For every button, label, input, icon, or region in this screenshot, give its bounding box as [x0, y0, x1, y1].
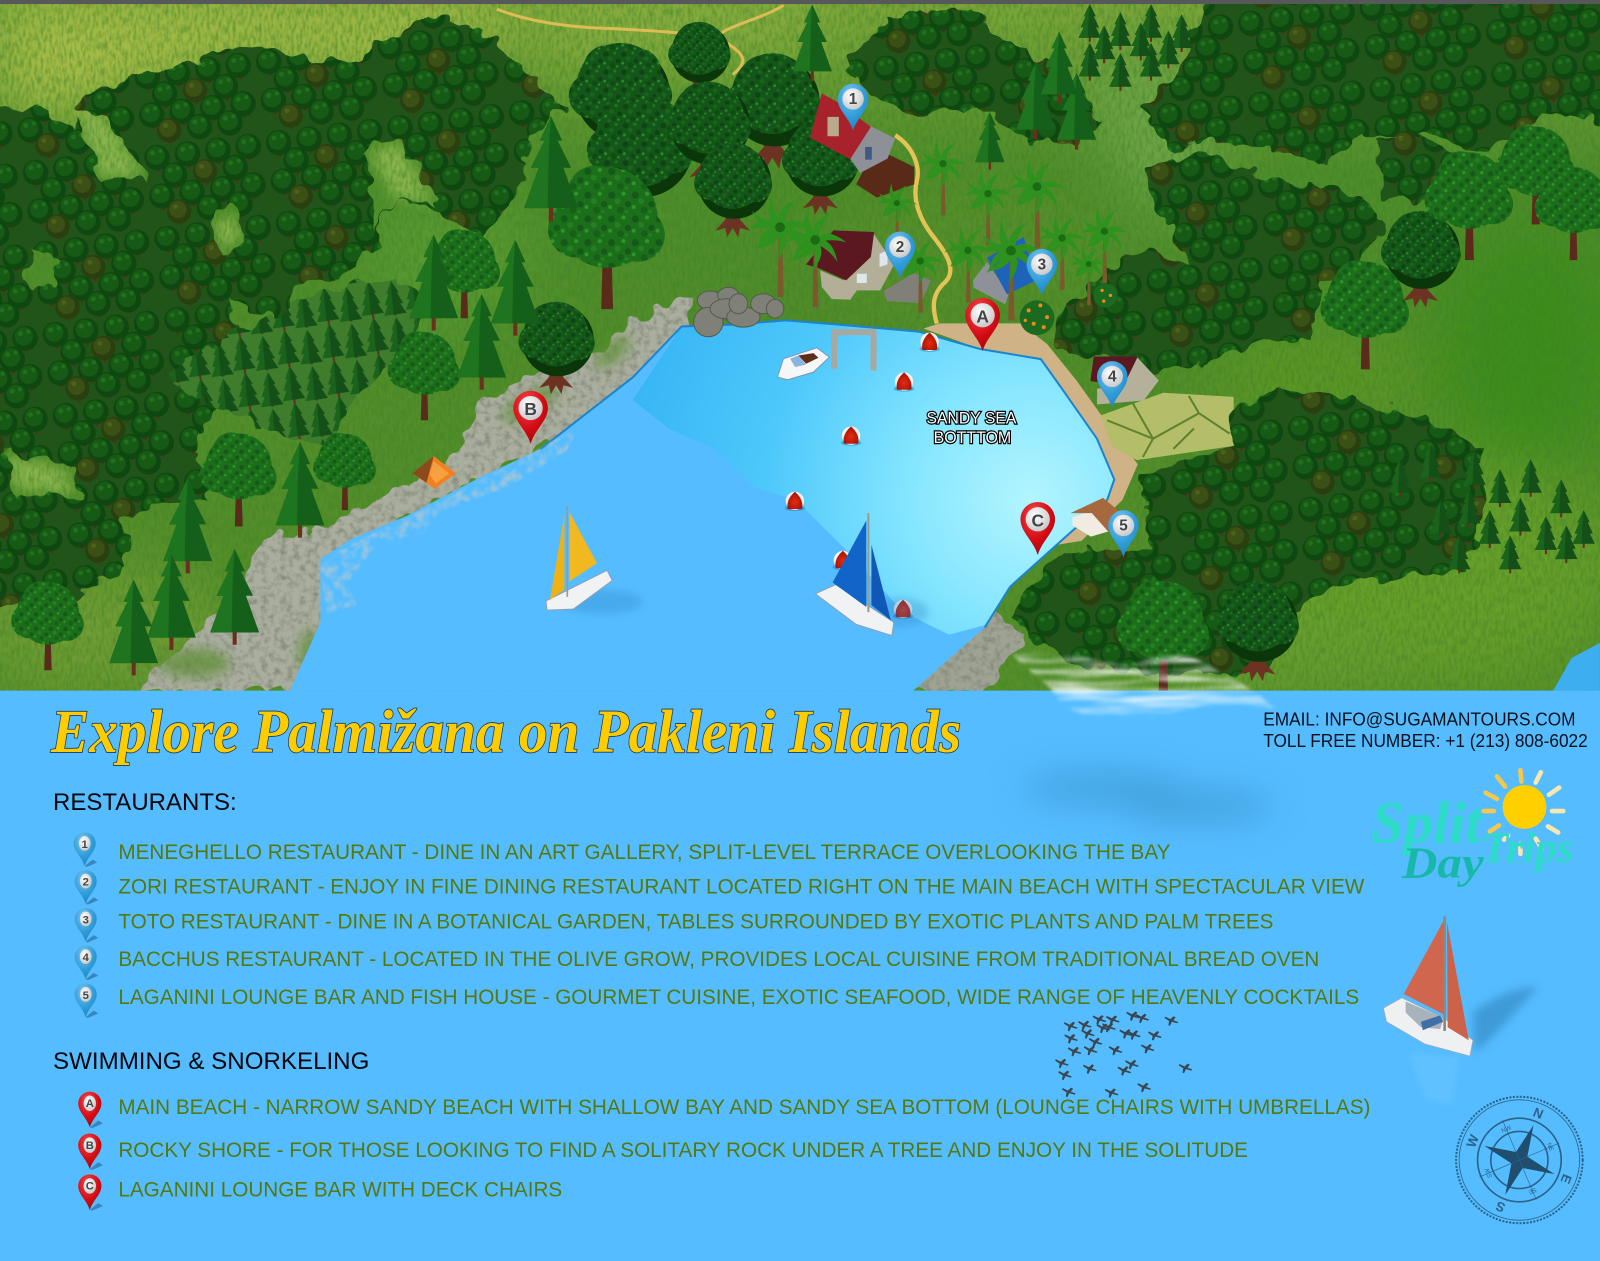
- buoys: [785, 333, 940, 619]
- legend item 2: 2: [83, 877, 89, 889]
- small house 5: [1070, 498, 1121, 537]
- palm trees: [748, 140, 1128, 320]
- shoreline edge: [541, 320, 1114, 627]
- grass patches on rocks: [158, 331, 635, 677]
- map pin 1: 1: [849, 91, 858, 108]
- map pin 4: 4: [1108, 369, 1117, 386]
- rocky shore south-east: [898, 612, 1026, 691]
- legend item 3: [75, 908, 1273, 942]
- legend item 1: 1: [82, 839, 88, 851]
- map pin C: C: [1031, 510, 1044, 530]
- dock: [834, 332, 874, 370]
- logo: Split Day Trips: Split: [1371, 790, 1483, 856]
- forest: west conifers: [170, 278, 420, 446]
- contact details: [1263, 708, 1588, 751]
- shallow sandy water: [633, 320, 1114, 635]
- forests: [0, 0, 1600, 691]
- bay water: [290, 320, 1114, 691]
- map pin 4: [1097, 361, 1128, 408]
- legend item 3: 3: [83, 914, 89, 926]
- house 3: [973, 237, 1036, 304]
- house 2: [806, 230, 931, 303]
- legend item B: B: [86, 1140, 94, 1152]
- map pin C: [1020, 502, 1055, 555]
- legend item 2: ZORI RESTAURANT - ENJOY IN FINE DINING RESTAURANT LOCATED RIGHT ON THE MAIN BEACH WITH SPECTACULAR VIEW: [118, 875, 1365, 899]
- legend item A: MAIN BEACH - NARROW SANDY BEACH WITH SHALLOW BAY AND SANDY SEA BOTTOM (LOUNGE CHAIRS WITH UMBRELLAS): [118, 1095, 1370, 1119]
- contact details: EMAIL: INFO@SUGAMANTOURS.COM: [1263, 708, 1576, 729]
- medium green trees: [11, 125, 1600, 694]
- map pin 1: [838, 84, 868, 131]
- compass: NE: [1545, 1142, 1555, 1152]
- dirt road at top: [497, 5, 784, 74]
- logo: Split Day Trips: Trips: [1482, 825, 1573, 872]
- big dark trees: [518, 22, 1461, 681]
- legend item 5: [75, 983, 1359, 1018]
- legend item A: [78, 1092, 1370, 1128]
- small conifers north: [1079, 4, 1193, 91]
- legend item C: [78, 1174, 562, 1211]
- logo: Split Day Trips: Day: [1401, 837, 1485, 887]
- compass: S: [1493, 1198, 1507, 1215]
- cloud shadow: [1020, 771, 1276, 822]
- island map: [0, 0, 1600, 694]
- compass: E: [1557, 1172, 1575, 1186]
- rocks: [694, 287, 784, 337]
- motor boat: [777, 348, 829, 380]
- legend item B: [78, 1134, 1248, 1170]
- map pin B: B: [524, 399, 537, 419]
- section heading: restaurants: RESTAURANTS:: [53, 789, 237, 816]
- compass: W: [1463, 1132, 1482, 1150]
- sandy beach: [923, 323, 1138, 546]
- legend item C: LAGANINI LOUNGE BAR WITH DECK CHAIRS: [118, 1178, 562, 1202]
- conifers: [109, 4, 1096, 675]
- legend item 5: 5: [83, 990, 89, 1002]
- swimming list: [78, 1092, 1370, 1211]
- grass terrain: [0, 0, 1600, 694]
- legend item 4: BACCHUS RESTAURANT - LOCATED IN THE OLIVE GROW, PROVIDES LOCAL CUISINE FROM TRADITIONAL BREAD OVEN: [118, 947, 1319, 971]
- legend item C: C: [86, 1181, 94, 1193]
- olive terraces: [1101, 393, 1234, 460]
- footpath: [895, 135, 950, 324]
- red sailboat: [1383, 916, 1540, 1105]
- map pin 5: [1108, 510, 1139, 557]
- legend item 1: MENEGHELLO RESTAURANT - DINE IN AN ART GALLERY, SPLIT-LEVEL TERRACE OVERLOOKING THE BAY: [118, 840, 1170, 864]
- contact details: TOLL FREE NUMBER: +1 (213) 808-6022: [1263, 730, 1588, 751]
- legend item 3: TOTO RESTAURANT - DINE IN A BOTANICAL GARDEN, TABLES SURROUNDED BY EXOTIC PLANTS AND PALM TREES: [118, 909, 1273, 933]
- legend item 4: [75, 946, 1319, 980]
- section heading: swimming and snorkeling: SWIMMING & SNORKELING: [53, 1048, 369, 1075]
- compass: [1444, 1085, 1595, 1235]
- label: sandy sea bottom: SANDY SEA: [927, 408, 1017, 427]
- compass: NW: [1500, 1124, 1513, 1135]
- label: sandy sea bottom: BOTTTOM: [934, 428, 1011, 447]
- legend item A: A: [86, 1098, 94, 1110]
- orange bushes: [1020, 283, 1117, 335]
- legend item B: ROCKY SHORE - FOR THOSE LOOKING TO FIND A SOLITARY ROCK UNDER A TREE AND ENJOY IN THE SOLITUDE: [118, 1138, 1248, 1162]
- corner water: [1553, 643, 1600, 691]
- legend item 1: [74, 832, 1170, 867]
- small conifers east: [1389, 444, 1595, 573]
- compass: SW: [1484, 1167, 1494, 1179]
- cloud: [1010, 651, 1276, 718]
- house 4: [1090, 356, 1159, 404]
- village: [694, 94, 1159, 404]
- legend item 4: 4: [83, 952, 90, 964]
- legend item 5: LAGANINI LOUNGE BAR AND FISH HOUSE - GOURMET CUISINE, EXOTIC SEAFOOD, WIDE RANGE OF HEAVENLY COCKTAILS: [118, 985, 1359, 1009]
- sun icon: [1484, 770, 1563, 854]
- label: sandy sea bottom: [927, 408, 1017, 447]
- map pin 3: 3: [1038, 256, 1046, 273]
- rocky shore west: [138, 298, 694, 691]
- map pin A: A: [976, 306, 989, 326]
- map pin 3: [1027, 249, 1057, 296]
- map pin 5: 5: [1119, 518, 1128, 535]
- restaurant list: [74, 832, 1365, 1018]
- logo: Split Day Trips: [1371, 770, 1573, 887]
- foam on the rocks: [320, 426, 580, 614]
- map pin 2: 2: [896, 239, 904, 256]
- blue sailboat: [815, 513, 929, 636]
- map pin A: [965, 298, 1000, 351]
- compass: N: [1531, 1105, 1546, 1122]
- title: Explore Palmižana on Pakleni Islands: [50, 698, 961, 766]
- map pin B: [513, 391, 548, 444]
- compass: SE: [1527, 1186, 1537, 1195]
- top border bar: [0, 0, 1600, 4]
- flock of birds: [1055, 1011, 1192, 1098]
- tent: [412, 456, 456, 489]
- map pin 2: [885, 232, 915, 279]
- legend item 2: [75, 870, 1365, 905]
- bottom information panel: [0, 691, 1600, 1261]
- house 1: [810, 94, 914, 198]
- yellow sailboat: [546, 506, 643, 614]
